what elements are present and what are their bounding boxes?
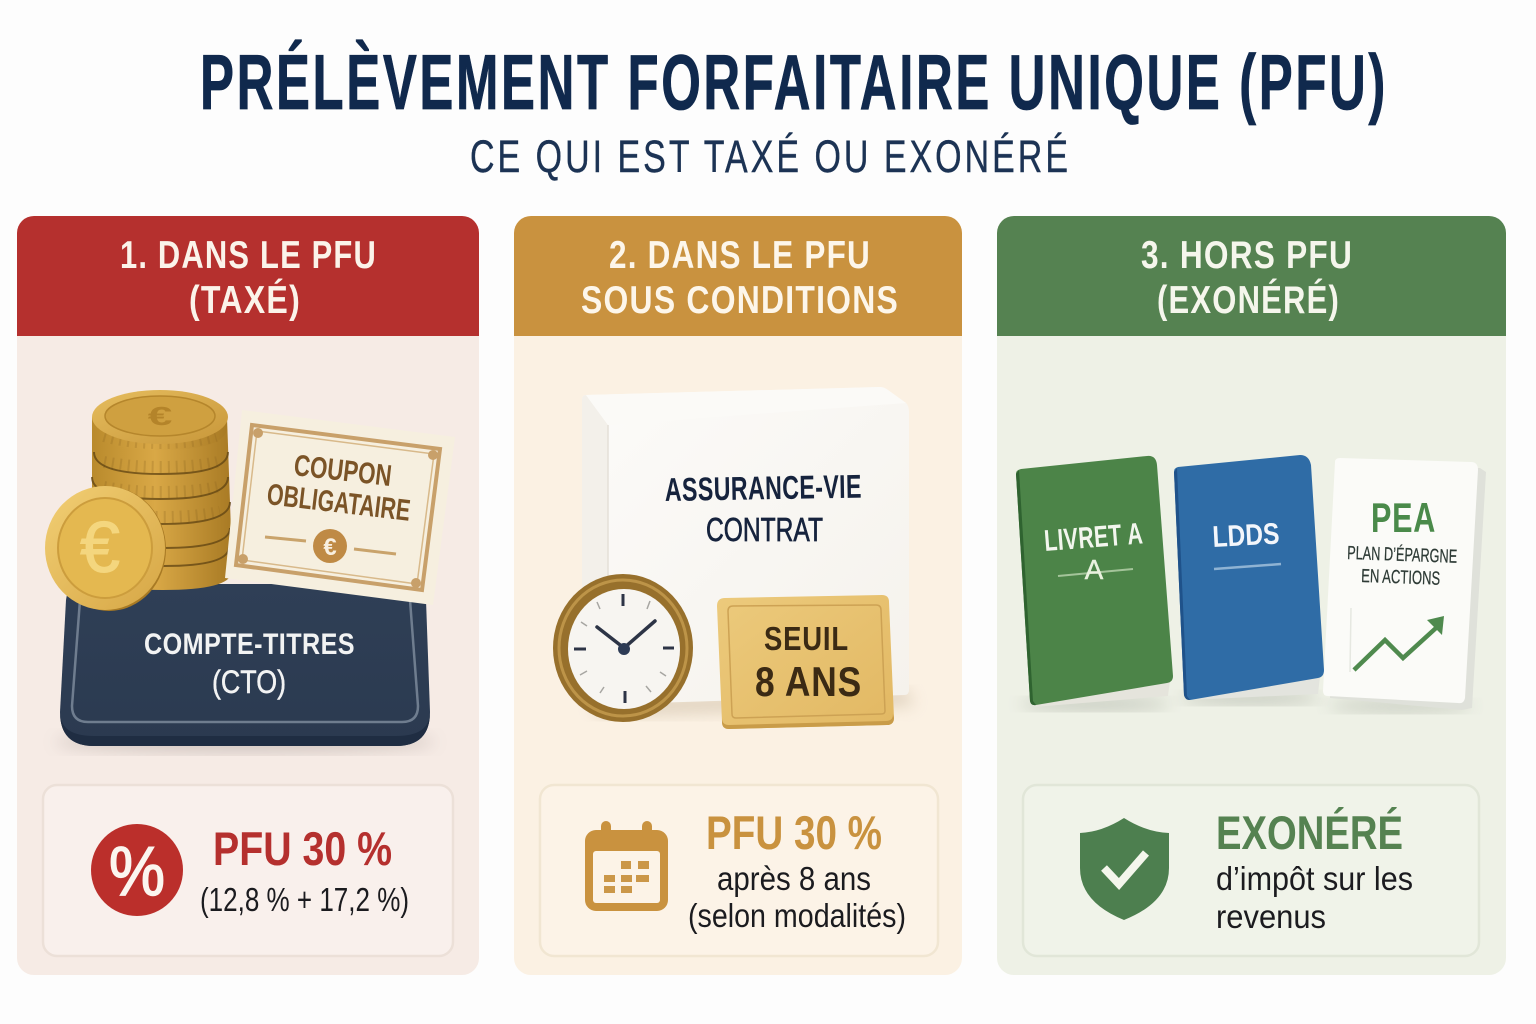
panel header: SOUS CONDITIONS bbox=[581, 279, 899, 322]
panel background bbox=[997, 216, 1506, 975]
result box: PFU 30 % après 8 ans bbox=[540, 785, 938, 956]
panel header: (TAXÉ) bbox=[189, 278, 301, 322]
panel header bbox=[514, 216, 962, 336]
illustration: livret A book bbox=[1016, 456, 1173, 710]
illustration: compte-titres slab bbox=[55, 584, 435, 752]
result detail: après 8 ans bbox=[717, 860, 871, 897]
illustration: LDDS book bbox=[1174, 455, 1324, 704]
panel header: (EXONÉRÉ) bbox=[1157, 278, 1340, 322]
result detail second line: revenus bbox=[1216, 898, 1326, 935]
result detail: d’impôt sur les bbox=[1216, 860, 1413, 897]
result detail: (12,8 % + 17,2 %) bbox=[200, 881, 409, 918]
result box: PFU 30 % bbox=[43, 785, 453, 956]
panel header: 2. DANS LE PFU bbox=[609, 234, 871, 277]
panel header bbox=[17, 216, 479, 336]
icon: percent badge bbox=[91, 824, 183, 916]
plaque: seuil 8 ans bbox=[717, 595, 894, 729]
illustration: LDDS book: LDDS bbox=[1212, 518, 1280, 554]
illustration: PEA booklet: PLAN D’ÉPARGNE bbox=[1347, 543, 1457, 568]
result box: exonéré bbox=[1023, 785, 1479, 956]
panel header: 3. HORS PFU bbox=[1141, 234, 1353, 277]
illustration: contrat assurance-vie box: CONTRAT bbox=[706, 511, 823, 548]
illustration: large euro coin bbox=[45, 486, 166, 611]
panel background bbox=[17, 216, 479, 975]
panel header: 1. DANS LE PFU bbox=[120, 234, 377, 277]
result condition: (selon modalités) bbox=[688, 897, 906, 934]
illustration: PEA booklet: PEA bbox=[1371, 494, 1436, 541]
icon: calendar bbox=[585, 821, 668, 911]
panel background bbox=[514, 216, 962, 975]
illustration: coupon obligataire bbox=[225, 410, 455, 605]
illustration: stack of euro coins bbox=[92, 390, 232, 590]
subtitle: CE QUI EST TAXÉ OU EXONÉRÉ bbox=[470, 131, 1071, 182]
icon: percent badge: % bbox=[109, 832, 165, 910]
illustration: livret A book: A bbox=[1085, 554, 1104, 585]
illustration: livret A book: LIVRET A bbox=[1043, 517, 1144, 558]
illustration: compte-titres slab: COMPTE-TITRES bbox=[144, 628, 355, 661]
illustration: compte-titres slab: (CTO) bbox=[212, 664, 286, 700]
illustration: coupon obligataire: OBLIGATAIRE bbox=[265, 478, 412, 528]
panel: hors PFU, exonéré bbox=[997, 216, 1506, 975]
result rate: PFU 30 % bbox=[706, 806, 882, 859]
panel: dans le PFU, taxé bbox=[17, 216, 479, 975]
illustration: contrat assurance-vie box bbox=[582, 387, 915, 716]
illustration: coupon obligataire: € bbox=[323, 534, 337, 561]
illustration: contrat assurance-vie box: ASSURANCE-VIE bbox=[664, 468, 862, 508]
illustration: PEA booklet: EN ACTIONS bbox=[1361, 566, 1441, 590]
result rate: PFU 30 % bbox=[213, 822, 392, 875]
illustration: large euro coin: € bbox=[80, 508, 120, 588]
illustration: stack of euro coins: € bbox=[148, 401, 172, 431]
plaque: seuil 8 ans: 8 ANS bbox=[755, 658, 862, 705]
result status: EXONÉRÉ bbox=[1216, 806, 1403, 859]
illustration: coupon obligataire: COUPON bbox=[292, 449, 393, 493]
panel header bbox=[997, 216, 1506, 336]
illustration: PEA booklet bbox=[1323, 458, 1486, 712]
panel: dans le PFU sous conditions bbox=[514, 216, 962, 975]
icon: shield with check bbox=[1080, 818, 1169, 920]
icon: clock bbox=[553, 574, 693, 722]
plaque: seuil 8 ans: SEUIL bbox=[764, 620, 849, 657]
